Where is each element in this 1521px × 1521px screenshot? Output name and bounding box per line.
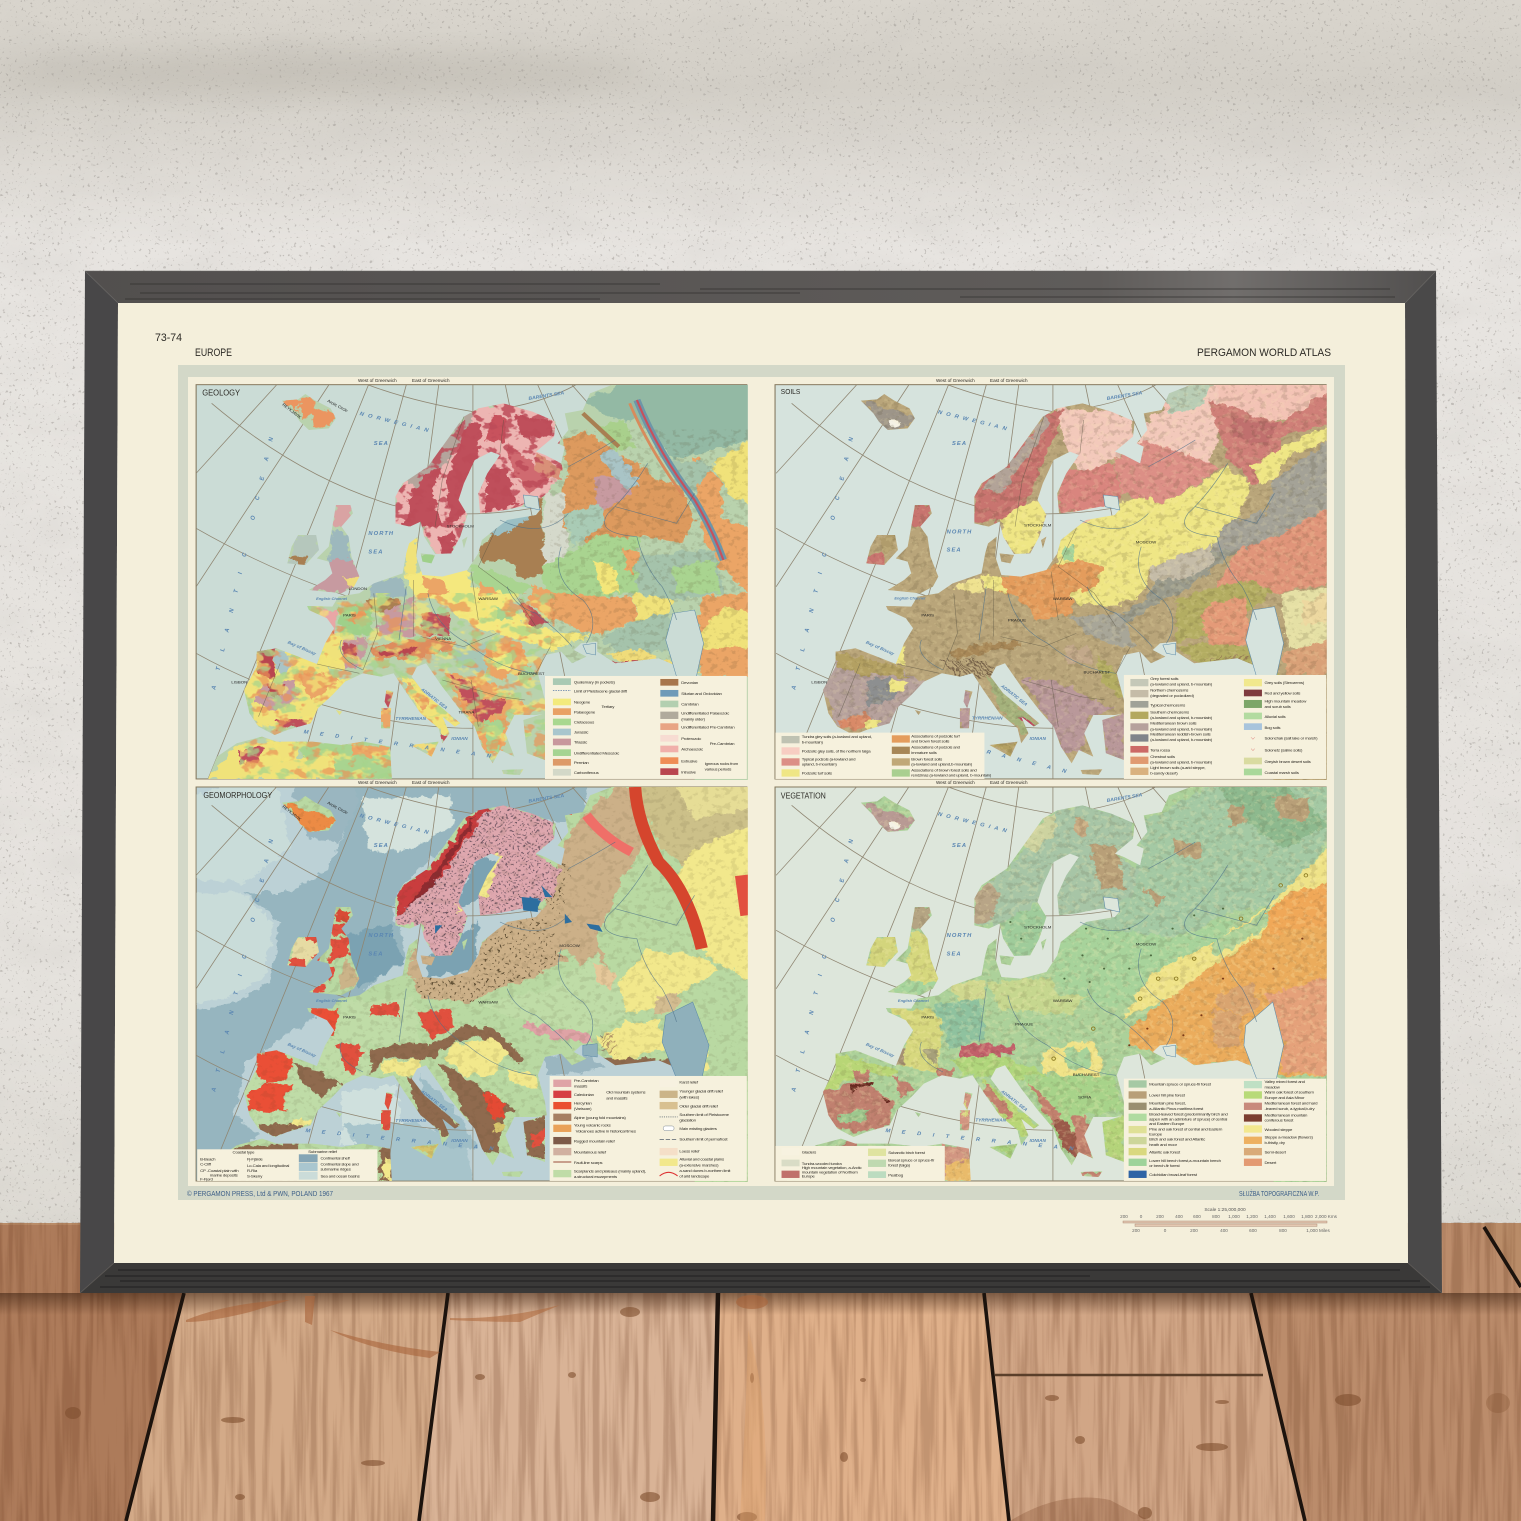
vegetation legend: right: Mountain spruce or spruce-fir forest — [1149, 1082, 1212, 1087]
geology legend: Undifferentiated Mesozoic — [574, 750, 619, 755]
scale bar: 1,400 — [1264, 1214, 1276, 1219]
vegetation legend: right: b-thistly, dry — [1264, 1140, 1286, 1145]
West / East of Greenwich marks: East of Greenwich — [412, 378, 450, 383]
geology legend: Cretaceous — [574, 720, 594, 725]
soils legend: left: (a-lowland and upland,b-mountain) — [911, 762, 973, 767]
geomorphology sea labels: IONIAN — [451, 1138, 468, 1143]
scale bar: 1,600 — [1283, 1214, 1295, 1219]
vegetation legend: right: Semi-desert — [1264, 1149, 1287, 1154]
geology legend: Triassic — [574, 740, 587, 745]
West / East of Greenwich marks — [358, 378, 1028, 785]
soils sea labels: NORTH — [947, 529, 972, 535]
geology legend: various periods — [705, 767, 731, 772]
vegetation city labels — [921, 925, 1156, 1100]
vegetation legend: right: Mediterranean mountain — [1264, 1112, 1308, 1117]
geology legend: Devonian — [681, 680, 699, 685]
cartographer credit: SŁUŻBA TOPOGRAFICZNA W.P. — [1239, 1189, 1319, 1198]
vegetation tree and steppe symbols — [1009, 908, 1224, 983]
vegetation legend: right: Broad-leaved forest (predominantly birch and — [1149, 1112, 1228, 1117]
scale bar: 600 — [1193, 1214, 1201, 1219]
geology legend: Silurian and Ordovician — [681, 691, 723, 696]
geomorphology legend: relief: a-structural escarpments — [574, 1174, 617, 1179]
vegetation city labels: STOCKHOLM — [1024, 925, 1052, 930]
vegetation sea labels: SEA — [952, 843, 967, 849]
geomorphology sea labels: SEA — [368, 951, 383, 957]
vegetation legend: left — [775, 1146, 945, 1181]
vegetation city labels: WARSAW — [1053, 998, 1073, 1003]
geology legend: Undifferentiated Palaeozoic — [681, 711, 729, 716]
scale bar: 800 — [1279, 1228, 1287, 1233]
soils legend: left: Associations of brown forest soils and — [911, 767, 978, 772]
geomorphology legend: relief: Loess relief — [679, 1149, 700, 1154]
geomorphology sea labels: English Channel — [316, 999, 348, 1003]
geomorphology legend: coastal type and submarine relief: Continental shelf — [320, 1155, 351, 1160]
soils legend: right: (a-lowland and upland, b-mountain) — [1150, 726, 1213, 731]
geology city labels: BUCHAREST — [518, 671, 545, 676]
vegetation sea labels: SEA — [947, 951, 962, 957]
West / East of Greenwich marks: East of Greenwich — [990, 780, 1028, 785]
geomorphology legend: relief: and massifs — [606, 1095, 627, 1100]
geomorphology legend: coastal type and submarine relief: Sea and ocean basins — [320, 1173, 360, 1178]
atlas name: PERGAMON WORLD ATLAS — [1197, 347, 1331, 359]
West / East of Greenwich marks: West of Greenwich — [936, 780, 975, 785]
geomorphology legend: relief: Southern limit of Pleistocene — [679, 1112, 730, 1117]
vegetation sea labels: Bay of Biscay — [865, 1042, 896, 1058]
vegetation legend: right: Lower hill beech forest,a-mountain beech — [1149, 1158, 1222, 1163]
vegetation legend: left: Glaciers — [802, 1150, 816, 1155]
geology sea labels: ADRIATIC SEA — [419, 686, 449, 710]
geology legend: Tertiary — [602, 704, 615, 709]
soils legend: right: Solonetz (saline soils) — [1264, 747, 1303, 752]
geology city labels: STOCKHOLM — [447, 523, 474, 528]
soils legend: right: Northern chernozems — [1150, 687, 1188, 692]
geomorphology legend: relief: Rugged mountain relief — [574, 1138, 616, 1143]
geomorphology city labels — [281, 800, 580, 1020]
geomorphology heading: GEOMORPHOLOGY — [203, 790, 273, 800]
soils sea labels: IONIAN — [1029, 736, 1047, 741]
soils legend: left: Brown forest soils — [911, 756, 942, 761]
geology city labels: REYKJAVIK — [281, 402, 303, 420]
vegetation legend: left: mountain vegetation of Northern — [802, 1169, 859, 1174]
geology sea labels: SEA — [368, 549, 383, 555]
geomorphology legend: relief: Older glacial drift relief — [679, 1103, 719, 1108]
geomorphology legend: relief: (Variscan) — [574, 1106, 592, 1111]
soils legend: right: Red and yellow soils — [1264, 691, 1300, 696]
geomorphology sea labels: MEDITERRANEAN — [305, 1128, 505, 1153]
vegetation city labels: MOSCOW — [1136, 941, 1156, 946]
geomorphology legend: relief: Old mountain systems — [606, 1090, 645, 1095]
vegetation sea labels: NORTH — [947, 933, 972, 939]
map sheet border band — [178, 365, 1345, 1200]
publisher credit: © PERGAMON PRESS, Ltd & PWN, POLAND 1967 — [187, 1189, 333, 1198]
panel: soils map — [774, 384, 1327, 780]
vegetation legend: right: heath and moor — [1149, 1142, 1178, 1147]
page number: 73-74 — [155, 332, 182, 344]
geomorphology city labels: Arctic Circle — [326, 800, 350, 815]
soils legend: right: High mountain meadow — [1264, 698, 1307, 703]
soils sea labels: English Channel — [894, 596, 926, 600]
vegetation legend: left: Tundra-wooded tundra — [802, 1161, 843, 1166]
scale bar: 0 — [1140, 1214, 1143, 1219]
Caspian Sea and lakes — [1103, 495, 1284, 677]
geology sea labels: ATLANTIC OCEAN — [211, 421, 279, 691]
soils sea labels: NORWEGIAN — [937, 410, 1011, 433]
scale bar: 1,200 — [1246, 1214, 1258, 1219]
soils legend: left: Associations of podzolic turf — [911, 733, 961, 738]
vegetation legend: right: Desert — [1264, 1160, 1277, 1165]
geology sea labels: IONIAN — [451, 736, 468, 741]
vegetation sea labels: ADRIATIC SEA — [999, 1088, 1029, 1112]
soils legend: right: Terra rossa — [1150, 747, 1171, 752]
soils legend: right: Typical chernozems — [1150, 702, 1185, 707]
vegetation legend: right: Europe and Asia Minor — [1264, 1095, 1305, 1100]
vegetation legend: right — [1124, 1079, 1326, 1181]
soils legend: right: Grey soils (Sierozems) — [1264, 680, 1305, 685]
soils legend: left: Podzolic turf soils — [802, 771, 832, 776]
Caspian Sea and lakes — [523, 495, 704, 677]
geology legend: Intrusive — [681, 769, 697, 774]
soils legend: right: Southern chernozems — [1150, 709, 1189, 714]
soils legend: right: Chestnut soils — [1150, 754, 1175, 759]
geology city labels: LISBON — [231, 679, 247, 684]
picture frame — [80, 271, 1442, 1293]
soils sea labels: SEA — [947, 548, 962, 554]
lakes and Caspian — [583, 1002, 709, 1079]
geology legend: Jurassic — [574, 730, 588, 735]
vegetation legend: left: Subarctic birch forest — [888, 1150, 926, 1155]
vegetation sea labels: English Channel — [898, 999, 930, 1003]
vegetation city labels: BUCHAREST — [1073, 1072, 1100, 1077]
geomorphology legend: coastal type and submarine relief: Fj-Fjärde — [247, 1156, 263, 1161]
vegetation legend: right: -leaved scrub, a-typical,b-dry — [1264, 1106, 1316, 1111]
wooden floor planks — [0, 1222, 1521, 1521]
vegetation legend: left: forest (taiga) — [888, 1163, 911, 1168]
geomorphology legend: relief: Caledonian — [574, 1092, 595, 1097]
geology heading: GEOLOGY — [202, 388, 240, 398]
geomorphology city labels: PARIS — [343, 1015, 356, 1020]
geology legend: Limit of Pleistocene glacial drift — [574, 688, 628, 693]
geomorphology legend: coastal type and submarine relief: R-Ria — [247, 1168, 258, 1173]
vegetation land colours — [814, 787, 1327, 1182]
panel: geology map — [196, 384, 748, 780]
soils legend: right: (degraded or podzolized) — [1150, 693, 1195, 698]
geomorphology sea labels: TYRRHENIAN — [395, 1118, 427, 1123]
vegetation sea labels: ATLANTIC OCEAN — [791, 823, 859, 1093]
vegetation legend: right: Lower hill pine forest — [1149, 1093, 1186, 1098]
geomorphology legend: relief: a-sand dunes b-northern limit — [679, 1168, 731, 1173]
soils legend: right: (a-lowland and upland, b-mountain) — [1150, 737, 1213, 742]
geomorphology legend: relief — [550, 1076, 747, 1181]
vegetation legend: right: Steppe a-meadow (flowers) — [1264, 1135, 1314, 1140]
vegetation legend: right: coniferous forest — [1264, 1118, 1294, 1123]
scale bar: 0 — [1164, 1228, 1167, 1233]
geomorphology sea labels: NORWEGIAN — [359, 813, 433, 837]
geology legend: Permian — [574, 760, 590, 765]
soils legend: left: Associations of podzols and — [911, 745, 961, 750]
geomorphology legend: relief: glaciation — [679, 1118, 697, 1123]
soils sea labels: ATLANTIC OCEAN — [791, 421, 859, 691]
vegetation sea labels: BARENTS SEA — [1106, 792, 1143, 804]
geology sea labels: Bay of Biscay — [287, 640, 317, 656]
cream paper sheet — [114, 303, 1408, 1263]
geology city labels: LONDON — [349, 586, 367, 591]
geology sea labels: NORTH — [368, 531, 394, 537]
vegetation city labels: PRAGUE — [1015, 1021, 1034, 1026]
soils legend: right: (a-lowland and upland, b-mountain) — [1150, 715, 1213, 720]
soils sea labels: RANEAN — [986, 750, 1078, 778]
soils legend: left: rendzinas (a-lowland and upland, b-mountain) — [911, 773, 992, 778]
vegetation sea labels: NORWEGIAN — [937, 812, 1011, 835]
geomorphology sea labels: ADRIATIC SEA — [419, 1088, 449, 1112]
geomorphology legend: relief: Pre-Cambrian — [574, 1078, 599, 1083]
soils city labels: WARSAW — [1053, 596, 1073, 601]
geology legend: Igneous rocks from — [705, 761, 739, 766]
geomorphology sea labels: SEA — [374, 843, 389, 849]
soils legend: left: and brown forest soils — [911, 739, 949, 744]
vegetation legend: right: aspen with an admixture of spruce) of central — [1149, 1116, 1227, 1121]
soils legend: right: (a-lowland and upland, b-mountain) — [1150, 682, 1213, 687]
soils legend: right: Grey forest soils — [1150, 676, 1178, 681]
soils legend: right: and scrub soils — [1264, 704, 1291, 709]
geomorphology tonal variation — [190, 782, 752, 1182]
vegetation heading: VEGETATION — [781, 791, 826, 801]
geomorphology legend: relief: Scarplands and plateaus (mainly upland), — [574, 1169, 646, 1174]
vegetation sea labels — [791, 792, 1143, 1153]
geomorphology legend: coastal type and submarine relief: Lo-Cala and longitudinal — [247, 1163, 289, 1168]
geomorphology sea labels: Bay of Biscay — [287, 1042, 317, 1058]
geology city labels: WARSAW — [478, 596, 498, 601]
vegetation legend: left: Peatbog — [888, 1173, 904, 1178]
soils legend: left: Tundra gley soils (a-lowland and upland, — [802, 734, 872, 739]
geology sea labels: TYRRHENIAN — [395, 716, 427, 721]
soils legend: right: Light brown soils (a-arid steppe, — [1150, 765, 1205, 770]
geomorphology legend: coastal type and submarine relief: Submarine relief — [308, 1149, 338, 1154]
West / East of Greenwich marks: West of Greenwich — [936, 378, 975, 383]
geology legend: (mainly older) — [681, 716, 706, 721]
geomorphology legend: coastal type and submarine relief — [197, 1149, 377, 1182]
geology land colours — [208, 385, 748, 780]
soils city labels: PRAGUE — [1008, 618, 1026, 623]
geology legend: Archaeozoic — [681, 747, 703, 752]
soils sea labels — [791, 390, 1143, 778]
West / East of Greenwich marks: West of Greenwich — [358, 780, 397, 785]
vegetation city labels: PARIS — [921, 1015, 934, 1020]
geomorphology legend: relief: (with lakes) — [679, 1094, 700, 1099]
vegetation sea labels: MEDITERRANEAN — [885, 1128, 1085, 1153]
scale bar: 1,000 — [1228, 1214, 1240, 1219]
geology city labels — [231, 398, 545, 714]
scale bar: 200 — [1156, 1214, 1164, 1219]
soils legend: right: (a-lowland and upland, b-mountain) — [1150, 760, 1213, 765]
soils sea labels: SEA — [952, 441, 967, 447]
vegetation sea labels: TYRRHENIAN — [975, 1117, 1007, 1122]
geology sea labels: MEDITERRANEAN — [303, 729, 503, 761]
scale bar — [1120, 1207, 1338, 1233]
geomorphology legend: relief: Alpine (young fold mountains) — [574, 1115, 627, 1120]
soils legend: right: Alluvial soils — [1264, 714, 1286, 719]
soils sea labels: ADRIATIC SEA — [999, 683, 1029, 707]
geomorphology legend: coastal type and submarine relief: F-Fjord — [200, 1177, 214, 1182]
geology legend: Undifferentiated Pre-Cambrian — [681, 725, 735, 730]
geomorphology legend: coastal type and submarine relief: B-Beach — [200, 1156, 216, 1161]
geomorphology sea labels: ATLANTIC OCEAN — [211, 823, 279, 1093]
geology legend — [545, 676, 747, 779]
scale bar: 1,800 — [1301, 1214, 1313, 1219]
geomorphology legend: relief: Fault-line scarps — [574, 1160, 603, 1165]
vegetation sea labels: IONIAN — [1029, 1138, 1047, 1143]
geology sea labels: SEA — [374, 441, 389, 447]
geomorphology sea labels — [211, 793, 565, 1153]
scale bar: 200 — [1120, 1214, 1128, 1219]
soils sea labels: BARENTS SEA — [1106, 390, 1143, 402]
geomorphology legend: relief: Mountainous relief — [574, 1149, 607, 1154]
soils land colours — [823, 385, 1327, 780]
geology city labels: Arctic Circle — [326, 398, 350, 413]
geomorphology sea labels: NORTH — [368, 933, 394, 939]
sea-floor relief — [196, 787, 606, 1181]
geology sea labels: English Channel — [316, 597, 348, 601]
geomorphology legend: relief: Main existing glaciers — [679, 1126, 717, 1131]
soils legend: right — [1124, 675, 1326, 779]
geology legend: Proterozoic — [681, 736, 701, 741]
geology legend: Palaeogene — [574, 709, 596, 714]
vegetation legend: right: Birch and oak forest and Atlantic — [1149, 1137, 1205, 1142]
vegetation legend: right: a-Atlantic Pinus maritima forest — [1149, 1106, 1204, 1111]
vegetation legend: right: Colchidian broad-leaf forest — [1149, 1172, 1198, 1177]
vegetation legend: right: Valley mixed forest and — [1264, 1079, 1306, 1084]
geology legend: Extrusive — [681, 758, 698, 763]
geomorphology legend: relief: Southern limit of permafrost — [679, 1136, 728, 1141]
scale bar: Scale 1:25,000,000 — [1204, 1207, 1246, 1213]
soils legend: left: b-mountain) — [802, 739, 824, 744]
soils legend: left: Podzolic gley soils, of the northern taiga — [802, 749, 871, 754]
scale bar: 600 — [1249, 1228, 1257, 1233]
vegetation city labels: SOFIA — [1078, 1095, 1091, 1100]
scale bar: 400 — [1175, 1214, 1183, 1219]
vegetation legend: right: Wooded steppe — [1264, 1127, 1293, 1132]
geology city labels: VIENNA — [435, 636, 451, 641]
vegetation legend: left: Boreal spruce or spruce-fir — [888, 1157, 935, 1162]
geology sea labels: BARENTS SEA — [528, 390, 565, 402]
scale bar: 800 — [1212, 1214, 1220, 1219]
geomorphology city labels: MOSCOW — [559, 943, 580, 948]
geomorphology legend: coastal type and submarine relief: Continental slope and — [320, 1161, 359, 1166]
geomorphology legend: coastal type and submarine relief: C-Cliff — [200, 1161, 212, 1166]
scale bar: 2,000 Kms — [1315, 1214, 1338, 1219]
geomorphology city labels: REYKJAVIK — [281, 804, 303, 822]
vegetation legend: right: and Eastern Europe — [1149, 1121, 1185, 1126]
geomorphology legend: relief: massifs — [574, 1083, 587, 1088]
geology legend: Neogene — [574, 700, 591, 705]
soils city labels: PARIS — [921, 613, 934, 618]
geomorphology legend: relief: of arid landscape — [679, 1174, 710, 1179]
geomorphology legend: coastal type and submarine relief: S-Skerry — [247, 1174, 263, 1179]
geology city labels: TIRANA — [458, 709, 475, 714]
geomorphology land colours — [231, 787, 748, 1182]
Caspian Sea and lakes — [1103, 897, 1284, 1079]
soils heading: SOILS — [781, 387, 800, 396]
soils sea labels: Bay of Biscay — [865, 640, 896, 656]
scale bar: 200 — [1132, 1228, 1140, 1233]
soils tonal variation — [824, 385, 1327, 780]
scale bar: 400 — [1220, 1228, 1228, 1233]
geology sea labels — [211, 390, 565, 761]
soils legend: right: Mediterranean reddish-brown soils — [1150, 731, 1211, 736]
geomorphology sea labels: BARENTS SEA — [528, 793, 565, 805]
geomorphology legend: relief: Alluvial and coastal plains — [679, 1157, 724, 1162]
geomorphology legend: relief: (a-extensive marshes) — [679, 1162, 719, 1167]
vegetation legend: right: Mediterranean forest and hard — [1264, 1101, 1318, 1106]
vegetation legend: right: meadow — [1264, 1084, 1281, 1089]
soils legend: left: upland, b-mountain) — [802, 762, 837, 767]
West / East of Greenwich marks: East of Greenwich — [990, 378, 1028, 383]
soils sea labels: TYRRHENIAN — [972, 715, 1003, 720]
soils city labels: MOSCOW — [1136, 539, 1156, 544]
panel: vegetation map — [774, 786, 1327, 1182]
geology legend: Quaternary (in pockets) — [574, 680, 616, 685]
geomorphology legend: coastal type and submarine relief: marine deposits — [210, 1172, 238, 1177]
vegetation legend: left: High mountain vegetation, a-Arctic — [802, 1165, 862, 1170]
geomorphology legend: coastal type and submarine relief: submarine ridges — [320, 1167, 351, 1172]
soils legend: right: Coastal marsh soils — [1264, 770, 1299, 775]
soils city labels: STOCKHOLM — [1024, 523, 1052, 528]
vegetation tonal variation — [816, 787, 1326, 1182]
geomorphology legend: coastal type and submarine relief: CP -Coastal plain with — [200, 1168, 239, 1173]
scale bar: 1,000 Miles — [1306, 1228, 1330, 1233]
West / East of Greenwich marks: East of Greenwich — [412, 780, 450, 785]
soils legend: right: Solonchak (salt lake or marsh) — [1264, 736, 1318, 741]
soils legend: right: Greyish brown desert soils — [1264, 759, 1311, 764]
vegetation legend: right: or beech-fir forest — [1149, 1163, 1181, 1168]
soils legend: right: Bog soils — [1264, 725, 1280, 730]
soils city labels: BUCHAREST — [1084, 669, 1111, 674]
geology sea labels: NORWEGIAN — [359, 411, 433, 435]
geology legend: Pre-Cambrian — [710, 741, 735, 746]
soils legend: left — [775, 733, 992, 779]
atlas section title: EUROPE — [195, 347, 232, 359]
geomorphology city labels: WARSAW — [478, 1000, 498, 1005]
panel: geomorphology map — [196, 786, 748, 1182]
geology city labels: PARIS — [343, 613, 356, 618]
geomorphology legend: coastal type and submarine relief: Coastal type — [233, 1150, 255, 1155]
geomorphology legend: relief: Young volcanic rocks — [574, 1123, 611, 1128]
vegetation legend: right: Pine and oak forest of central and Eastern — [1149, 1126, 1223, 1131]
geomorphology legend: relief: Hercynian — [574, 1100, 593, 1105]
vegetation legend: right: Atlantic oak forest — [1149, 1149, 1181, 1154]
geology fine patchwork of strata — [240, 430, 749, 780]
geomorphology legend: relief: Karst relief — [679, 1080, 699, 1085]
vegetation legend: right: Europe — [1149, 1132, 1163, 1137]
geology legend: Carboniferous — [574, 770, 599, 775]
vegetation legend: right: Warm oak forest of southern — [1264, 1090, 1315, 1095]
vegetation legend: right: Mountain pine forest, — [1149, 1101, 1186, 1106]
soils legend: left: Typical podzols (a-lowland and — [802, 756, 856, 761]
soils legend: right: b-sandy desert) — [1150, 771, 1178, 776]
scale bar: 200 — [1190, 1228, 1198, 1233]
soils city labels — [811, 523, 1156, 684]
vegetation legend: left: Europe — [802, 1174, 815, 1179]
West / East of Greenwich marks: West of Greenwich — [358, 378, 397, 383]
geomorphology legend: relief: Volcanoes active in historical times — [576, 1129, 636, 1134]
geomorphology legend: relief: Younger glacial drift relief — [679, 1089, 724, 1094]
geology legend: Cambrian — [681, 702, 699, 707]
soils legend: right: Mediterranean brown soils — [1150, 721, 1196, 726]
soils legend: left: immature soils — [911, 750, 937, 755]
soils city labels: LISBON — [811, 679, 827, 684]
